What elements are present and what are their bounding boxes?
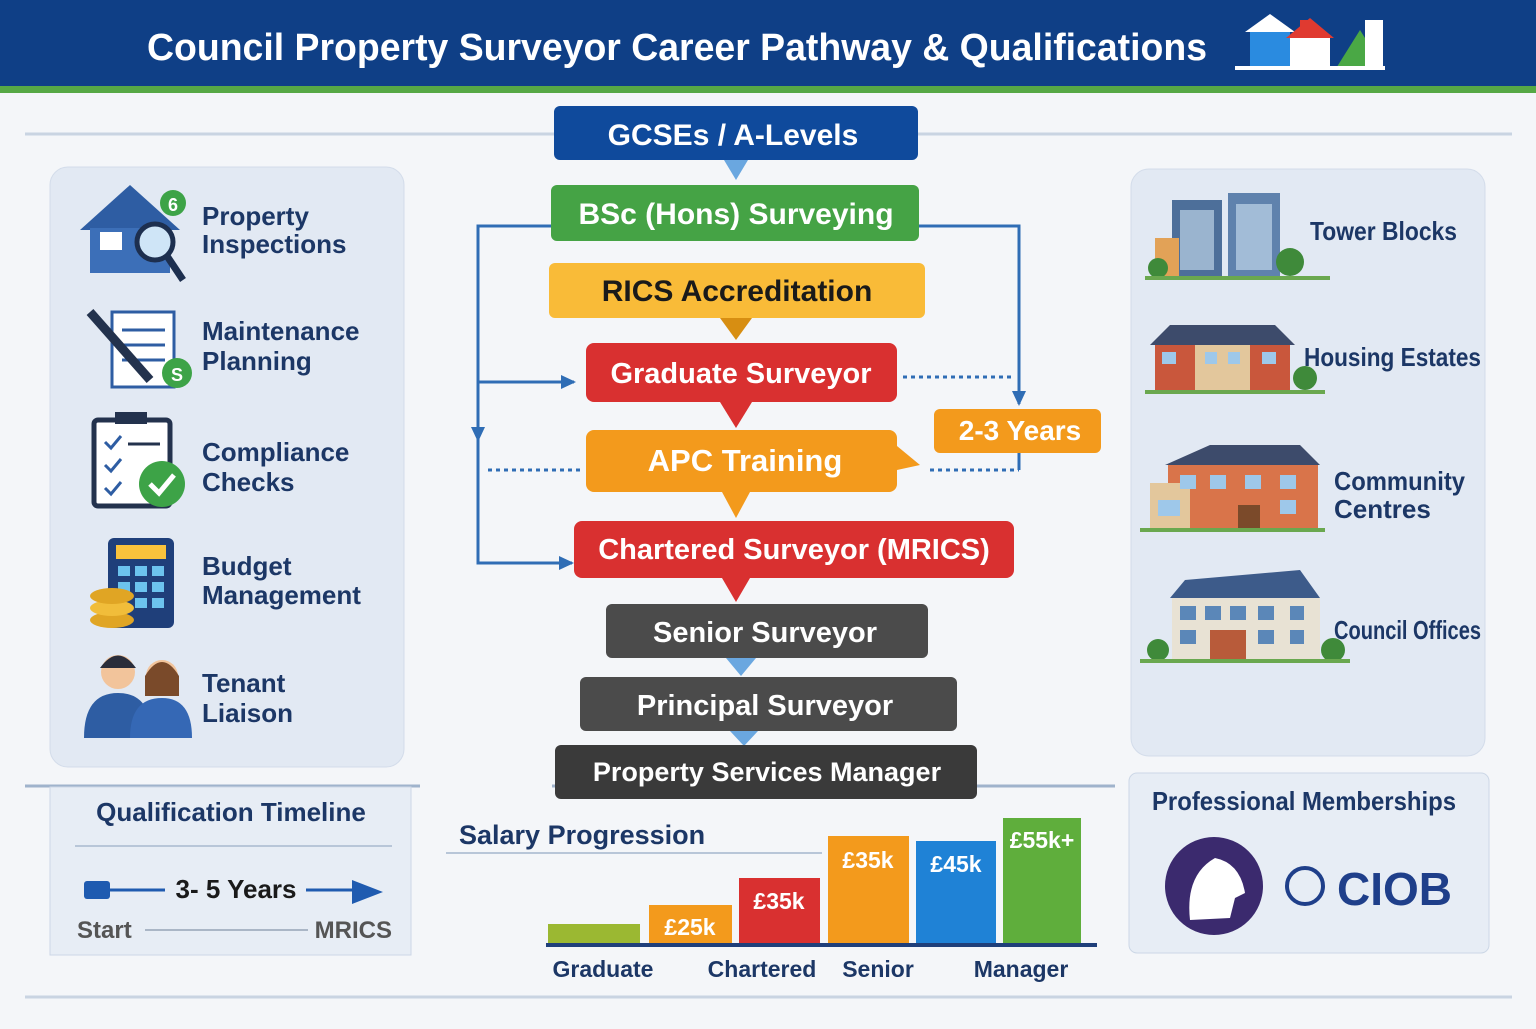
text: property inspections: Inspections xyxy=(202,229,346,259)
heading: professional memberships: Professional Memberships xyxy=(1152,786,1456,816)
icon: maintenance: S xyxy=(171,365,183,385)
chart: salary progression: £45k xyxy=(930,851,982,877)
box: Principal Surveyor: Principal Surveyor xyxy=(637,690,893,722)
icon: buildings xyxy=(1235,14,1385,70)
box: GCSEs: GCSEs / A-Levels xyxy=(608,119,858,152)
text: community centres: Centres xyxy=(1334,494,1431,524)
text: community centres: Community xyxy=(1334,466,1465,496)
text: tower blocks: Tower Blocks xyxy=(1310,216,1457,246)
box: Senior Surveyor xyxy=(606,604,928,658)
chart: salary progression: £35k xyxy=(753,888,805,914)
badge: 2-3 Years: 2-3 Years xyxy=(959,415,1081,446)
box: Property Services Manager: Property Services Manager xyxy=(593,757,942,787)
logo: RICS lion xyxy=(1165,837,1263,935)
box: BSc: BSc (Hons) Surveying xyxy=(578,198,894,231)
icon: property inspection: 6 xyxy=(168,195,178,215)
text: council offices: Council Offices xyxy=(1334,615,1481,645)
heading: qualification timeline: Qualification Timeline xyxy=(96,797,366,827)
text: budget management: Management xyxy=(202,580,361,610)
chart: salary progression: £35k xyxy=(842,847,894,873)
panel: qualification timeline xyxy=(50,787,411,955)
icon: maintenance xyxy=(90,312,192,388)
icon: community centres xyxy=(1140,445,1325,532)
flow connectors xyxy=(25,226,1115,786)
box: Graduate Surveyor xyxy=(586,343,897,402)
icon: property inspection xyxy=(80,185,186,280)
labels: start / MRICS: Start xyxy=(77,917,132,944)
chart: salary progression: Senior xyxy=(842,956,914,982)
logo: CIOB: CIOB xyxy=(1337,863,1452,915)
badge: 2-3 Years xyxy=(934,409,1101,453)
icon: council offices xyxy=(1140,570,1350,663)
icon: compliance xyxy=(94,412,185,507)
box: Property Services Manager xyxy=(555,745,977,799)
icon: tenants xyxy=(84,655,192,738)
box: Senior Surveyor: Senior Surveyor xyxy=(653,617,877,649)
panel: professional memberships xyxy=(1129,773,1489,953)
header xyxy=(0,0,1536,93)
timeline arrow xyxy=(84,874,383,904)
title: Council Property Surveyor Career Pathway & Qualifications xyxy=(147,27,1207,69)
small triangles between boxes xyxy=(720,160,920,746)
text: property inspections: Property xyxy=(202,201,309,231)
box: APC Training xyxy=(586,430,897,492)
panel: duties xyxy=(50,167,404,767)
text: compliance checks: Compliance xyxy=(202,437,349,467)
chart: salary progression: £25k xyxy=(664,914,716,940)
heading: salary progression: Salary Progression xyxy=(459,820,705,850)
box: GCSEs xyxy=(554,106,918,160)
text: budget management: Budget xyxy=(202,551,292,581)
icon: calculator xyxy=(90,538,174,628)
timeline arrow: 3- 5 Years xyxy=(176,874,296,904)
box: Chartered Surveyor: Chartered Surveyor (MRICS) xyxy=(598,534,990,566)
icon: tower blocks xyxy=(1145,193,1330,280)
text: maintenance planning: Planning xyxy=(202,346,312,376)
chart: salary progression: Manager xyxy=(974,956,1068,982)
box: RICS xyxy=(549,263,925,318)
chart: salary progression: Chartered xyxy=(708,956,816,982)
text: tenant liaison: Liaison xyxy=(202,698,293,728)
text: tenant liaison: Tenant xyxy=(202,668,285,698)
box: RICS: RICS Accreditation xyxy=(602,275,872,308)
box: Graduate Surveyor: Graduate Surveyor xyxy=(610,358,872,390)
labels: start / MRICS: MRICS xyxy=(315,917,392,944)
logo: CIOB xyxy=(1287,863,1452,915)
box: BSc xyxy=(551,185,919,241)
box: Chartered Surveyor xyxy=(574,521,1014,578)
box: APC Training: APC Training xyxy=(648,443,842,478)
text: compliance checks: Checks xyxy=(202,467,294,497)
box: Principal Surveyor xyxy=(580,677,957,731)
chart: salary progression xyxy=(446,818,1097,982)
icon: housing estates xyxy=(1145,325,1325,394)
labels: start / MRICS xyxy=(77,917,392,944)
chart: salary progression: Graduate xyxy=(553,956,653,982)
text: maintenance planning: Maintenance xyxy=(202,316,360,346)
chart: salary progression: £55k+ xyxy=(1010,827,1074,853)
text: housing estates: Housing Estates xyxy=(1304,342,1481,372)
panel: property types xyxy=(1131,169,1485,756)
